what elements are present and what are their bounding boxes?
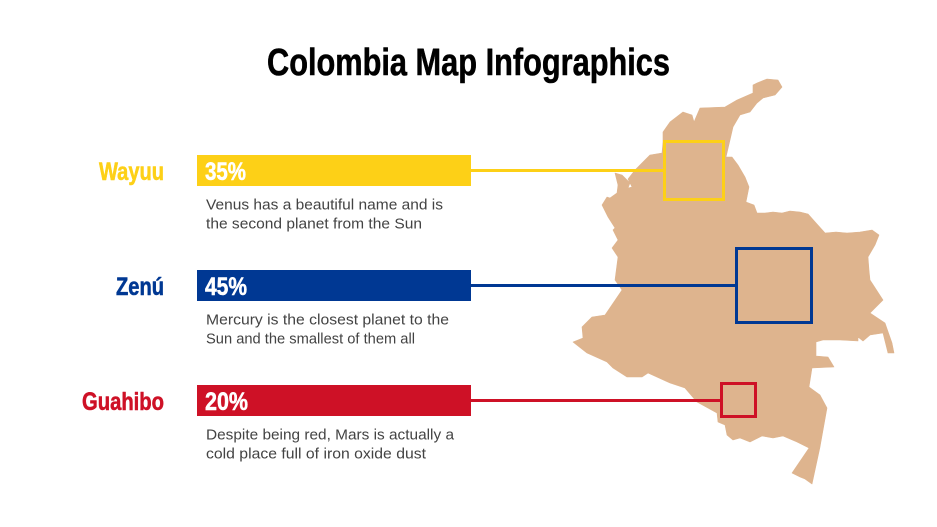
description: Zenú: Sun and the smallest of them all xyxy=(206,330,415,348)
description: Wayuu: Venus has a beautiful name and is xyxy=(206,196,443,214)
row: Zenú xyxy=(116,248,812,348)
bar: Guahibo 20% xyxy=(197,385,471,416)
map marker: Guahibo xyxy=(722,384,756,416)
bar: Zenú 45% xyxy=(197,270,471,301)
description: Guahibo: Despite being red, Mars is actually a xyxy=(206,426,455,444)
row: Wayuu xyxy=(99,142,724,232)
title: Colombia Map Infographics xyxy=(267,42,670,84)
description: Zenú: Mercury is the closest planet to the xyxy=(206,312,449,328)
value: 45%: 45% xyxy=(205,273,247,301)
label: Guahibo: Guahibo xyxy=(82,388,164,416)
label: Zenú: Zenú xyxy=(116,273,164,301)
row: Guahibo xyxy=(82,384,756,462)
description: Guahibo: cold place full of iron oxide dust xyxy=(206,446,427,462)
connector: Wayuu xyxy=(471,169,664,172)
description: Wayuu: the second planet from the Sun xyxy=(206,216,422,232)
label: Wayuu: Wayuu xyxy=(99,158,164,186)
map marker: Zenú xyxy=(736,248,812,322)
value: 35%: 35% xyxy=(205,158,246,186)
connector: Guahibo xyxy=(471,399,721,402)
map of Colombia xyxy=(573,79,894,484)
connector: Zenú xyxy=(471,284,736,287)
bar: Wayuu 35% xyxy=(197,155,471,186)
map marker: Wayuu xyxy=(664,142,724,200)
value: 20%: 20% xyxy=(205,388,248,416)
